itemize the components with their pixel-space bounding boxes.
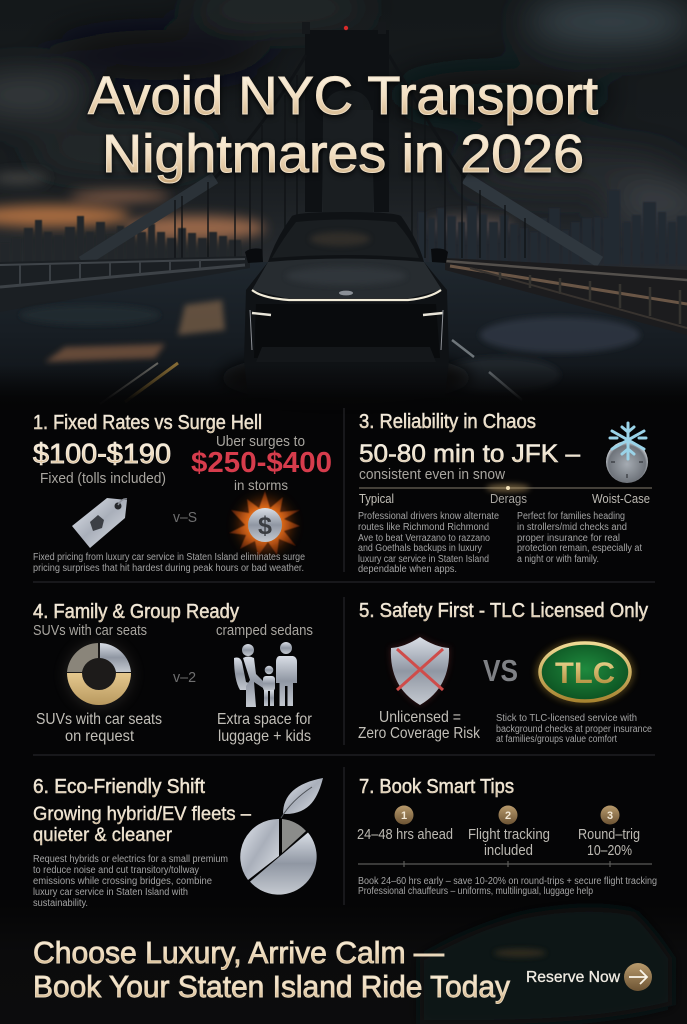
icon: TLC badge: TLC [555, 657, 615, 690]
body text right: protection remain, especially at [517, 543, 642, 554]
icon: crossed shield [390, 636, 450, 706]
reserve button: Reserve Now [526, 969, 620, 986]
windshield [272, 220, 419, 258]
section dividers [33, 408, 655, 905]
heading: 7. Book Smart Tips [359, 776, 514, 798]
uber caption: Uber surges to [216, 433, 305, 450]
call to action headline [33, 935, 510, 1004]
hero photo: stormy bridge [0, 0, 687, 410]
jfk time: 50-80 min to JFK – [359, 440, 580, 468]
fixed price: $100-$190 [33, 438, 171, 469]
body text right: Perfect for families heading [517, 511, 625, 522]
body text: sustainability. [33, 898, 88, 909]
footer: faded car backdrop [0, 905, 687, 1024]
hero car [221, 212, 471, 404]
timeline labels [359, 491, 650, 506]
step 3 badge [600, 806, 620, 824]
body text: pricing surprises that hit hardest during peak hours or bad weather. [33, 563, 304, 574]
bridge towers [305, 30, 389, 212]
body text [358, 876, 657, 897]
lane markings [125, 363, 178, 402]
heading: 1. Fixed Rates vs Surge Hell [33, 412, 262, 434]
step 1 badge [394, 806, 414, 824]
body text right: proper insurance for real [517, 533, 620, 544]
body text left: routes like Richmond Richmond [358, 522, 489, 533]
icon: family [234, 642, 297, 707]
suspension cables [82, 55, 600, 262]
right label: Extra space for [217, 711, 313, 728]
heading: 5. Safety First - TLC Licensed Only [359, 600, 648, 622]
step 2 badge [498, 806, 518, 824]
body text: Request hybrids or electrics for a small premium [33, 854, 228, 865]
panel: 3 reliability in chaos [358, 411, 652, 575]
panel: 1 fixed rates vs surge [33, 412, 332, 574]
right caption: cramped sedans [216, 622, 313, 639]
mirrors [245, 248, 263, 263]
body text: background checks at proper insurance [496, 724, 652, 735]
body text right [517, 511, 642, 565]
heading: 3. Reliability in Chaos [359, 411, 536, 433]
panel: 5 safety first [358, 600, 652, 745]
risk label: Unlicensed = [379, 709, 461, 726]
timeline labels: Derags [490, 491, 527, 506]
reserve button [526, 963, 652, 991]
body text left: luxury car service in Staten Island [358, 554, 489, 565]
snow caption: consistent even in snow [359, 466, 505, 483]
body text: Fixed pricing from luxury car service in Staten Island eliminates surge [33, 552, 305, 563]
right skyline [418, 190, 687, 265]
body text: luxury car service in Staten Island with [33, 887, 188, 898]
left label line 2: on request [65, 728, 135, 745]
body text [496, 713, 652, 745]
left skyline [0, 216, 241, 265]
icon: snowy clock [606, 423, 648, 483]
body text right: a night or with family. [517, 554, 599, 565]
step 2 label [468, 826, 550, 859]
call to action headline: Choose Luxury, Arrive Calm — [33, 935, 444, 970]
hero fade into black [0, 365, 687, 410]
donut chart [65, 641, 133, 709]
body text: Professional chauffeurs – uniforms, multilingual, luggage help [358, 886, 593, 897]
step 3 label: Round–trig [578, 826, 640, 843]
title: Nightmares in 2026 [102, 124, 584, 184]
subheading line 2: quieter & cleaner [33, 825, 173, 846]
fixed caption: Fixed (tolls included) [40, 470, 166, 487]
versus label: VS [483, 653, 518, 688]
subheading: Growing hybrid/EV fleets – [33, 804, 251, 825]
step 1 label: 24–48 hrs ahead [357, 826, 453, 843]
body text left: and Goethals backups in luxury [358, 543, 482, 554]
body text [33, 854, 228, 909]
step 3 label: 10–20% [587, 842, 632, 859]
icon: surge coin burst [229, 491, 300, 556]
body text: Book 24–60 hrs early – save 10-20% on round-trips + secure flight tracking [358, 876, 657, 887]
left label: SUVs with car seats [36, 711, 162, 728]
step 3 label [578, 826, 640, 859]
panel: 4 family and group [33, 601, 313, 745]
timeline labels: Typical [359, 491, 394, 506]
heading: 6. Eco-Friendly Shift [33, 776, 205, 798]
body text left: Ave to beat Verrazano to razzano [358, 533, 490, 544]
title [88, 66, 598, 184]
heading: 4. Family & Group Ready [33, 601, 239, 623]
icon: leaf pie chart [240, 778, 323, 895]
icon: price tag [72, 498, 127, 548]
step 2 label: Flight tracking [468, 826, 550, 843]
body text left: Professional drivers know alternate [358, 511, 499, 522]
icon: TLC badge [535, 639, 635, 705]
body text right: in strollers/mid checks and [517, 522, 627, 533]
step 1 badge: 1 [401, 810, 407, 822]
step timeline [358, 861, 652, 867]
title: Avoid NYC Transport [88, 66, 598, 126]
panel: 7 book smart tips [357, 776, 657, 897]
storms caption: in storms [234, 477, 288, 493]
step 2 badge: 2 [505, 810, 511, 822]
icon: surge coin burst: $ [258, 512, 272, 540]
hood [252, 258, 442, 298]
risk label line 2: Zero Coverage Risk [358, 725, 481, 742]
versus label: v–2 [173, 669, 196, 686]
versus label: v–S [173, 509, 197, 526]
road surface [0, 262, 687, 410]
left guard rail [0, 256, 250, 312]
grille and lower bumper [254, 304, 440, 358]
panel: 6 eco friendly shift [33, 776, 323, 909]
left caption: SUVs with car seats [33, 622, 147, 639]
step 2 label: included [484, 842, 533, 859]
right guard rail [445, 258, 687, 335]
body text: at families/groups value comfort [496, 734, 617, 745]
right label line 2: luggage + kids [218, 728, 311, 745]
body text: Stick to TLC-licensed service with [496, 713, 637, 724]
wet road reflections [20, 300, 640, 393]
timeline axis [359, 484, 652, 492]
surge price: $250-$400 [191, 447, 332, 479]
body text [33, 552, 305, 574]
step 3 badge: 3 [607, 810, 613, 822]
body text left [358, 511, 499, 575]
call to action headline: Book Your Staten Island Ride Today [33, 969, 510, 1004]
timeline labels: Woist-Case [592, 491, 650, 506]
body text left: dependable when apps. [358, 564, 457, 575]
body text: to reduce noise and cut transitory/tollway [33, 865, 199, 876]
LED light bar [252, 290, 441, 300]
body text: emissions while crossing bridges, combine [33, 876, 212, 887]
